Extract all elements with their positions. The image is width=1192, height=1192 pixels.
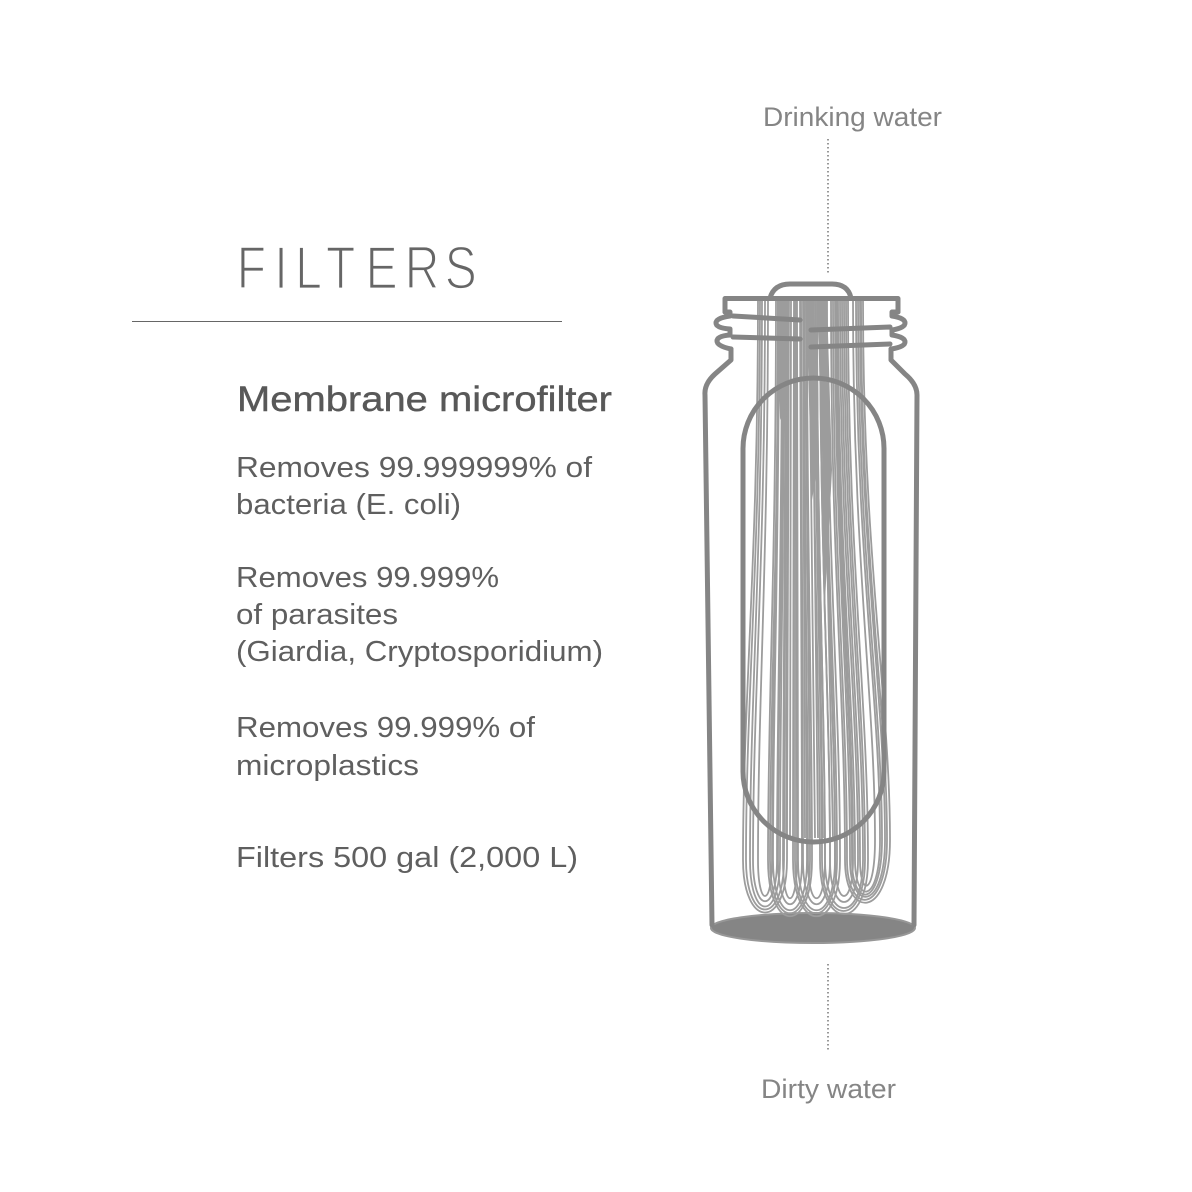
bottle outline left [705,349,731,925]
dense strand bundles [777,300,832,620]
text block: microplastics [236,712,536,782]
label: drinking water: Drinking water [763,102,942,132]
arrow: dirty water dotted line [827,964,829,1050]
left threads [716,312,800,349]
text block: parasites: Removes 99.999% [236,562,499,594]
label: dirty water: Dirty water [761,1074,896,1104]
text block: bacteria: Removes 99.999999% of [236,452,593,484]
bottle outline right [891,349,917,925]
text block: parasites: (Giardia, Cryptosporidium) [236,636,603,668]
bottle base ellipse [711,913,915,943]
right threads [811,312,905,349]
text block: capacity: Filters 500 gal (2,000 L) [236,842,578,874]
inner capsule [743,378,884,842]
text block: microplastics: microplastics [236,750,419,782]
text block: microplastics: Removes 99.999% of [236,712,536,744]
title rule [132,320,562,322]
cap rim and handle [725,284,898,312]
text block: bacteria [236,452,593,521]
heading: membrane microfilter: Membrane microfilter [237,380,612,419]
arrow: drinking water dotted line [827,139,829,275]
text block: parasites [236,562,603,668]
hollow fibre strands [743,300,890,916]
text block: bacteria: bacteria (E. coli) [236,489,461,521]
title: FILTERS [237,234,477,302]
filter bottle illustration [705,284,917,943]
text block: parasites: of parasites [236,599,398,631]
